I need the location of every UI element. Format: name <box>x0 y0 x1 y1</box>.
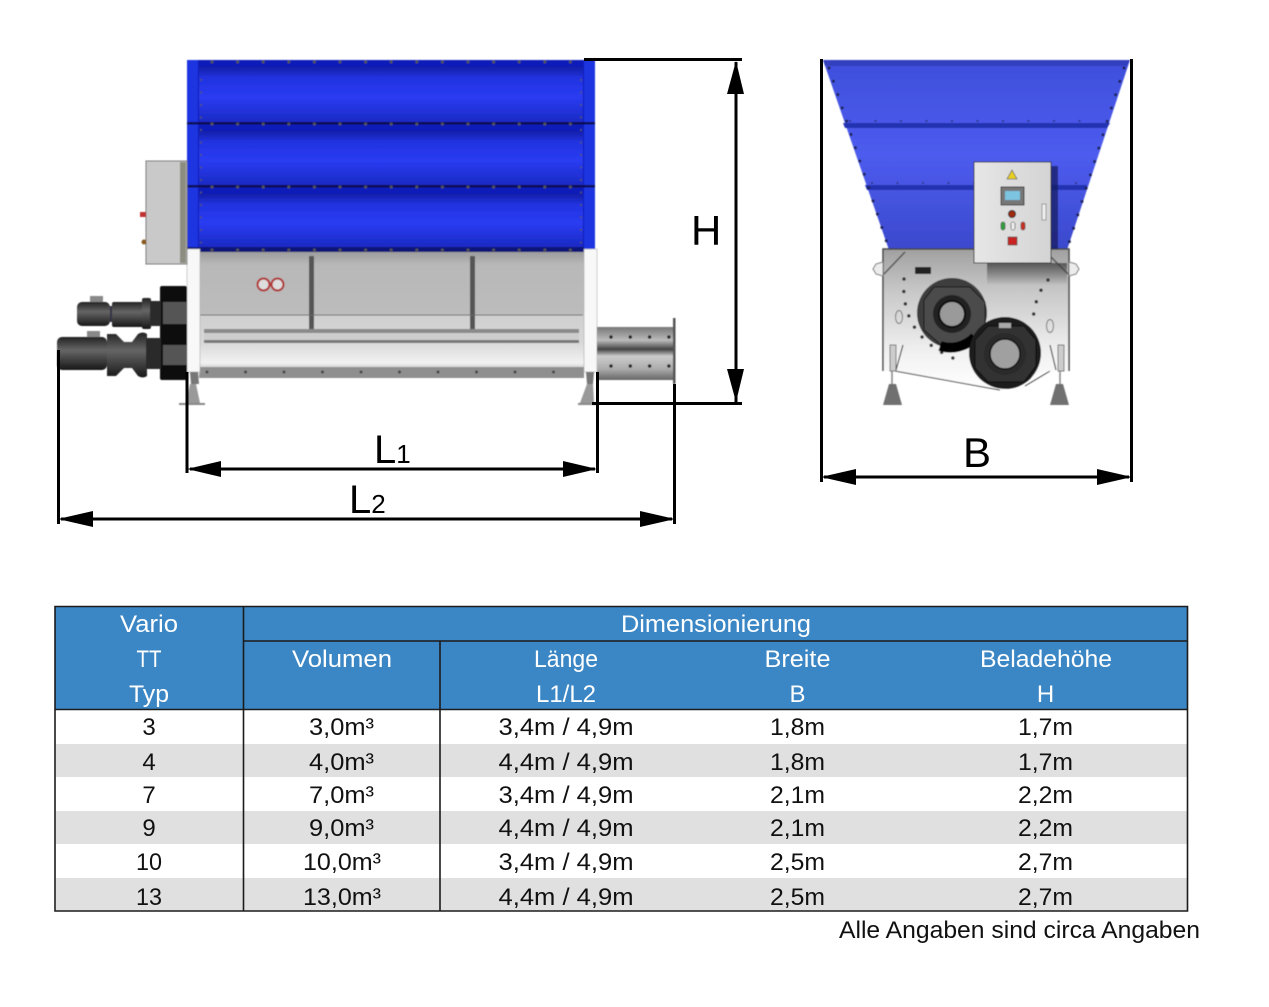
row type 9: 2,1m <box>770 815 825 842</box>
side control box <box>140 161 187 264</box>
row type 9: 4,4m / 4,9m <box>498 815 634 842</box>
table header text: H <box>1037 681 1054 708</box>
dimension H <box>584 60 744 404</box>
row type 9 <box>142 815 1073 842</box>
row type 13: 13,0m³ <box>303 884 381 911</box>
row type 3: 3,4m / 4,9m <box>498 714 634 741</box>
row type 3: 3,0m³ <box>309 714 374 741</box>
dimension L2: L2 <box>349 478 386 522</box>
row type 10: 2,7m <box>1018 849 1073 876</box>
row type 3: 1,8m <box>770 714 825 741</box>
table header text: Länge <box>534 646 598 673</box>
table header text: Volumen <box>292 646 392 673</box>
dimension B: B <box>963 429 991 476</box>
table header background <box>55 606 1187 710</box>
table header text: Breite <box>764 646 830 673</box>
side hopper blue panels <box>187 60 595 252</box>
row type 10: 10,0m³ <box>303 849 381 876</box>
dimension B <box>821 59 1132 485</box>
table header text: Typ <box>129 681 169 708</box>
footnote: Alle Angaben sind circa Angaben <box>839 917 1200 944</box>
row type 3: 3 <box>142 714 156 741</box>
table header text: Beladehöhe <box>980 646 1112 673</box>
front hopper <box>823 60 1130 250</box>
table header text: L1/L2 <box>536 681 596 708</box>
row type 13: 2,5m <box>770 884 825 911</box>
row type 10: 2,5m <box>770 849 825 876</box>
gear motors <box>57 286 187 380</box>
front steel body <box>873 249 1079 390</box>
control cabinet <box>974 162 1058 263</box>
dimension L1 <box>187 372 598 477</box>
row type 4: 4,0m³ <box>309 749 374 776</box>
table header text: TT <box>136 646 162 673</box>
row type 10: 3,4m / 4,9m <box>498 849 634 876</box>
table header text <box>120 611 1112 708</box>
dimension L1: L1 <box>374 428 411 472</box>
row type 13: 4,4m / 4,9m <box>498 884 634 911</box>
table striped rows <box>56 744 1187 911</box>
row type 4: 4,4m / 4,9m <box>498 749 634 776</box>
row type 4: 4 <box>142 749 156 776</box>
row type 4 <box>142 749 1073 776</box>
warning labels <box>258 278 284 290</box>
row type 9: 9 <box>142 815 156 842</box>
row type 13 <box>136 884 1073 911</box>
row type 3: 1,7m <box>1018 714 1073 741</box>
discharge conveyor <box>597 318 676 384</box>
row type 13: 13 <box>136 884 162 911</box>
row type 4: 1,8m <box>770 749 825 776</box>
row type 7: 2,2m <box>1018 782 1073 809</box>
side lower steel trough <box>199 252 584 378</box>
dimension L2 <box>58 350 675 527</box>
front feet <box>883 345 1069 405</box>
row type 9: 9,0m³ <box>309 815 374 842</box>
front view machine <box>823 60 1130 405</box>
dimension H: H <box>691 207 721 254</box>
row type 4: 1,7m <box>1018 749 1073 776</box>
shaft bearing top <box>917 278 987 348</box>
table header text: B <box>789 681 806 708</box>
side white posts and feet <box>179 249 598 405</box>
row type 7 <box>142 782 1073 809</box>
dimensions table <box>55 606 1188 911</box>
row type 13: 2,7m <box>1018 884 1073 911</box>
row type 7: 2,1m <box>770 782 825 809</box>
table header text: Dimensionierung <box>621 611 811 638</box>
table header text: Vario <box>120 611 178 638</box>
row type 3 <box>142 714 1073 741</box>
row type 7: 7,0m³ <box>309 782 374 809</box>
row type 10: 10 <box>136 849 162 876</box>
shaft bearing bottom <box>969 317 1041 389</box>
side view machine <box>57 60 676 405</box>
row type 7: 7 <box>142 782 156 809</box>
row type 10 <box>136 849 1073 876</box>
row type 7: 3,4m / 4,9m <box>498 782 634 809</box>
row type 9: 2,2m <box>1018 815 1073 842</box>
